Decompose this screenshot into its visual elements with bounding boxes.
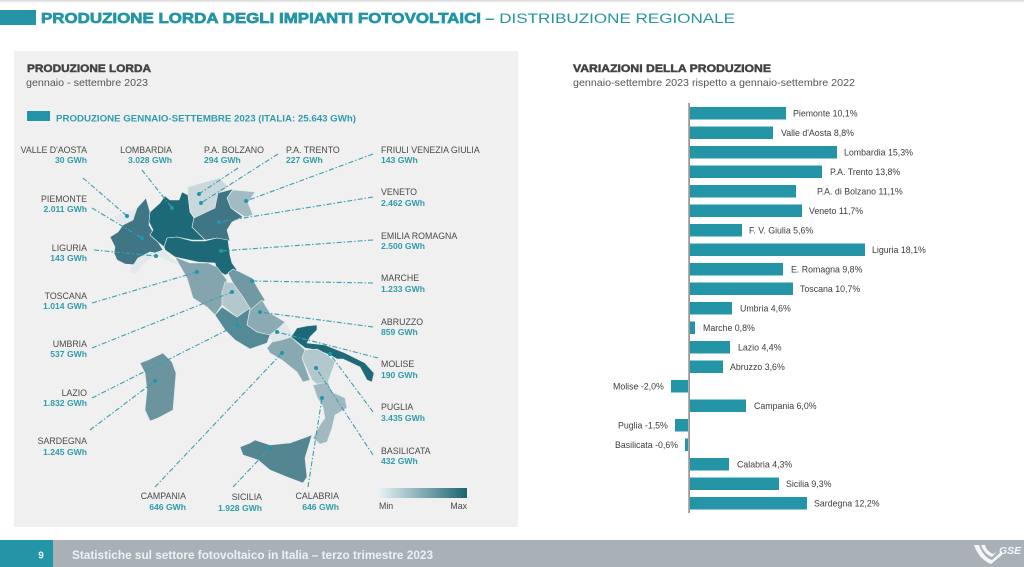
bar chart: Lombardia 15,3% — [844, 148, 913, 158]
region labels: 1.233 GWh — [381, 284, 425, 294]
bar chart: P.A. Trento 13,8% — [830, 167, 900, 177]
region labels: 30 GWh — [55, 155, 87, 165]
colour scale legend: Min — [379, 501, 393, 511]
bar chart: Sicilia 9,3% — [786, 479, 832, 489]
region labels: TOSCANA — [45, 291, 87, 301]
region labels: 1.245 GWh — [43, 447, 87, 457]
region labels: 646 GWh — [302, 502, 339, 512]
region labels: 3.435 GWh — [381, 413, 425, 423]
chart heading: VARIAZIONI DELLA PRODUZIONE — [573, 63, 771, 75]
bar chart — [613, 103, 926, 513]
panel background — [14, 51, 518, 527]
region: Valle d'Aosta — [114, 208, 137, 225]
region labels: 1.928 GWh — [218, 503, 262, 513]
region labels: 859 GWh — [381, 327, 418, 337]
panel heading: PRODUZIONE LORDA — [27, 63, 151, 75]
region labels: 190 GWh — [381, 370, 418, 380]
region: Abruzzo — [247, 300, 285, 335]
region labels: P.A. TRENTO — [286, 145, 340, 155]
region labels: 294 GWh — [204, 155, 241, 165]
bar chart: F. V. Giulia 5,6% — [749, 226, 813, 236]
region labels: UMBRIA — [53, 339, 87, 349]
logo wordmark: GSE — [999, 545, 1022, 557]
region: Toscana — [175, 257, 227, 315]
region labels: 2.011 GWh — [44, 204, 87, 214]
region labels: 1.014 GWh — [43, 301, 87, 311]
region labels: LIGURIA — [52, 243, 87, 253]
region labels: BASILICATA — [381, 446, 431, 456]
region: Veneto — [192, 189, 243, 241]
icon: GSE logo — [974, 545, 1022, 564]
region: Sicilia — [240, 435, 312, 483]
region labels: FRIULI VENEZIA GIULIA — [381, 145, 480, 155]
bar chart: Marche 0,8% — [703, 323, 755, 333]
region labels: 646 GWh — [149, 502, 186, 512]
region: Marche — [228, 269, 265, 310]
region: Basilicata — [302, 349, 335, 385]
region: Piemonte — [110, 198, 163, 265]
colour scale legend — [379, 488, 468, 511]
leader lines and dots — [83, 154, 378, 487]
region labels: 2.462 GWh — [381, 198, 425, 208]
region labels: LAZIO — [62, 388, 87, 398]
panel subheading: gennaio - settembre 2023 — [26, 78, 148, 89]
bar chart: E. Romagna 9,8% — [791, 264, 863, 274]
region labels: 227 GWh — [286, 155, 323, 165]
bar chart: Umbria 4,6% — [740, 304, 791, 314]
region: Friuli Venezia Giulia — [227, 190, 255, 217]
region labels: 2.500 GWh — [381, 241, 425, 251]
region labels: 432 GWh — [381, 456, 418, 466]
region labels: EMILIA ROMAGNA — [381, 231, 457, 241]
region labels: ABRUZZO — [381, 317, 423, 327]
bar chart: Lazio 4,4% — [738, 342, 782, 352]
bar chart: Sardegna 12,2% — [814, 498, 880, 508]
region: Sardegna — [140, 353, 176, 421]
bar chart: P.A. di Bolzano 11,1% — [817, 186, 903, 196]
title: PRODUZIONE LORDA DEGLI IMPIANTI FOTOVOLTAICI — [41, 10, 481, 27]
bar chart: Abruzzo 3,6% — [730, 362, 785, 372]
region labels: P.A. BOLZANO — [204, 145, 264, 155]
bar chart: Basilicata -0,6% — [615, 440, 678, 450]
footer — [0, 540, 1024, 567]
legend swatch — [27, 111, 50, 121]
header accent bar — [0, 10, 36, 25]
region labels: 143 GWh — [50, 253, 87, 263]
region labels: VALLE D'AOSTA — [21, 145, 87, 155]
region: Trentino Alto Adige — [188, 178, 228, 218]
page number: 9 — [38, 550, 44, 562]
region: Liguria — [130, 250, 180, 273]
bar chart: Puglia -1,5% — [618, 420, 668, 430]
region labels: MARCHE — [381, 273, 419, 283]
region labels: 3.028 GWh — [128, 155, 172, 165]
region labels: CAMPANIA — [141, 491, 186, 501]
panel: produzione lorda — [14, 51, 518, 527]
region labels: 143 GWh — [381, 155, 418, 165]
bar chart: Liguria 18,1% — [872, 245, 926, 255]
map of Italy — [110, 178, 374, 483]
region labels: VENETO — [381, 187, 417, 197]
title suffix: – DISTRIBUZIONE REGIONALE — [485, 11, 735, 27]
region labels: 1.832 GWh — [43, 398, 87, 408]
region labels — [21, 145, 480, 513]
region labels: SICILIA — [232, 492, 262, 502]
region labels: LOMBARDIA — [120, 145, 172, 155]
region labels: MOLISE — [381, 359, 414, 369]
region: Umbria — [222, 282, 250, 317]
region labels: CALABRIA — [295, 491, 339, 501]
region: Molise — [270, 323, 293, 342]
footer band — [0, 540, 1024, 567]
chart subheading: gennaio-settembre 2023 rispetto a gennaio-settembre 2022 — [573, 78, 855, 89]
page number tab — [0, 540, 53, 567]
region: Lazio — [215, 307, 270, 349]
bar chart: Veneto 11,7% — [809, 206, 863, 216]
footer text: Statistiche sul settore fotovoltaico in Italia – terzo trimestre 2023 — [72, 548, 433, 562]
region: Puglia — [291, 325, 374, 382]
bar chart: Piemonte 10,1% — [793, 108, 858, 118]
header — [0, 10, 735, 27]
panel: variazioni della produzione — [573, 63, 926, 513]
bar chart: Calabria 4,3% — [737, 460, 792, 470]
bar chart: Toscana 10,7% — [800, 284, 860, 294]
region labels: SARDEGNA — [38, 436, 87, 446]
bar chart: Valle d'Aosta 8,8% — [781, 128, 854, 138]
legend label: PRODUZIONE GENNAIO-SETTEMBRE 2023 (ITALIA: 25.643 GWh) — [56, 114, 356, 124]
region: Emilia Romagna — [164, 237, 237, 275]
colour scale legend: Max — [450, 501, 468, 511]
region labels: PIEMONTE — [41, 194, 87, 204]
bar chart: Molise -2,0% — [613, 382, 664, 392]
bar chart: Campania 6,0% — [754, 401, 817, 411]
region labels: PUGLIA — [381, 402, 413, 412]
region: Calabria — [313, 382, 347, 444]
region labels: 537 GWh — [50, 349, 87, 359]
region: Campania — [267, 337, 310, 382]
region: Lombardia — [149, 192, 205, 247]
